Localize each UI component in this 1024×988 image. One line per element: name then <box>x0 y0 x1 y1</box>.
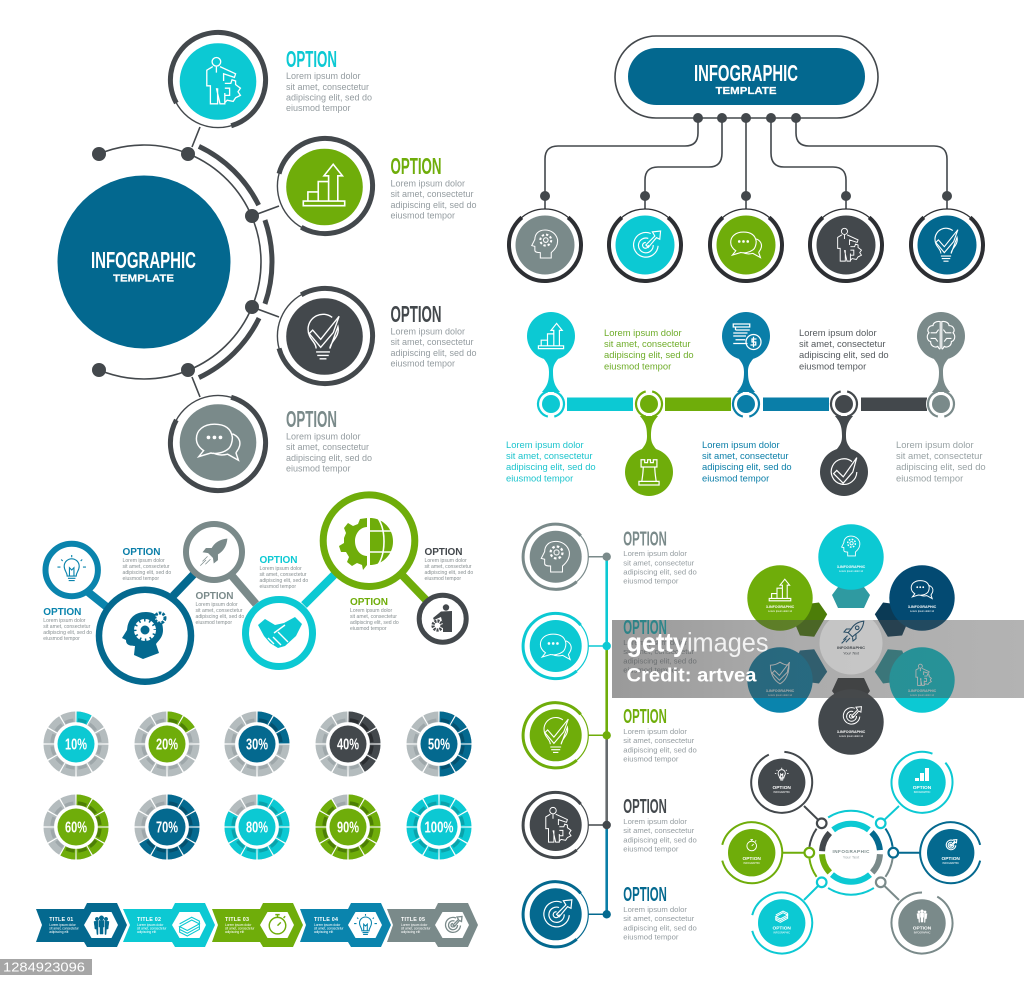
circle: bulb <box>896 194 998 296</box>
circle: chat <box>695 194 797 296</box>
step 03 <box>212 903 303 947</box>
satellite: dark bulb <box>749 749 815 815</box>
step 04 <box>300 903 391 947</box>
list text 2: Lorem ipsum dolor <box>623 638 687 647</box>
panel: percentage donut gauges <box>49 717 466 854</box>
petal: upper right: Lorem ipsum dolor sit <box>910 610 934 613</box>
step 03: Lorem ipsum dolor <box>225 923 252 927</box>
satellite: blue target: INFOGRAPHIC <box>942 862 959 865</box>
option 3 text <box>390 301 477 368</box>
list item: target <box>510 868 611 960</box>
timeline text blocks: eiusmod tempor <box>799 360 866 372</box>
step 05: TITLE 05 <box>401 917 425 923</box>
list text 5: Lorem ipsum dolor <box>623 905 687 914</box>
list text 4: OPTION <box>623 795 667 818</box>
timeline text blocks: Lorem ipsum dolor <box>506 439 584 450</box>
title pill: TEMPLATE <box>716 86 777 97</box>
satellite: cyan money: INFOGRAPHIC <box>773 932 790 934</box>
satellite: cyan chart <box>879 739 965 825</box>
watermark band: Your Text <box>843 651 860 655</box>
gauge 40% <box>321 717 375 771</box>
text: option gray: Lorem ipsum dolor <box>196 602 238 608</box>
central circle with title <box>58 176 230 348</box>
gauge 70%: 70% <box>156 820 178 836</box>
text: option green: OPTION <box>350 597 388 608</box>
gauge 60%: 60% <box>65 820 87 836</box>
timeline text blocks: adipiscing elit, sed do <box>799 349 889 360</box>
panel: hexagon ribbon steps <box>36 903 478 947</box>
petal: upper left <box>747 565 813 631</box>
option 2 text: OPTION <box>390 153 442 179</box>
central circle with title: INFOGRAPHIC <box>91 247 196 273</box>
text: option light blue: adipiscing elit, sed do <box>43 630 92 636</box>
timeline text blocks: eiusmod tempor <box>896 472 963 484</box>
step 01: Lorem ipsum dolor <box>49 923 77 927</box>
text: option gray: eiusmod tempor <box>196 620 232 626</box>
text: option green: eiusmod tempor <box>350 626 387 632</box>
option 3 text: adipiscing elit, sed do <box>390 348 477 358</box>
option 2 text: eiusmod tempor <box>390 210 455 220</box>
list text 5 <box>623 883 697 942</box>
option 3 text: sit amet, consectetur <box>390 337 474 347</box>
list text 4: Lorem ipsum dolor <box>623 817 687 826</box>
text: option blue <box>122 547 171 582</box>
list text 3: Lorem ipsum dolor <box>623 727 687 736</box>
satellite: cyan chart: OPTION <box>913 785 932 791</box>
title pill <box>615 36 878 118</box>
gauge 10%: 10% <box>65 736 87 754</box>
text: option cyan: adipiscing elit, sed do <box>260 578 308 584</box>
timeline text blocks: Lorem ipsum dolor <box>604 327 682 338</box>
gauge 20%: 20% <box>156 736 178 754</box>
circle: person gear <box>419 595 466 642</box>
text: option cyan: OPTION <box>260 555 298 566</box>
text: option light blue: Lorem ipsum dolor <box>43 618 86 624</box>
list item: person gear <box>510 779 611 871</box>
connector lines <box>545 118 947 209</box>
text: option dark: eiusmod tempor <box>424 576 461 582</box>
petal: bottom <box>818 689 884 755</box>
text: option gray: sit amet, consectetur <box>196 608 243 614</box>
petal: top: Lorem ipsum dolor sit <box>839 570 863 573</box>
circle: handshake <box>246 600 312 666</box>
text: option cyan <box>260 555 308 590</box>
step 04: sit amet, consectetur <box>314 926 344 930</box>
text: option gray: adipiscing elit, sed do <box>196 614 244 620</box>
text: option dark: adipiscing elit, sed do <box>424 570 473 576</box>
timeline text blocks: sit amet, consectetur <box>896 450 982 461</box>
spokes <box>782 806 921 900</box>
watermark band: Credit: artvea <box>626 666 757 686</box>
petal: lower right: 3-INFOGRAPHIC <box>908 689 937 693</box>
gauge 100%: 100% <box>424 820 454 836</box>
satellite: green watch: OPTION <box>743 856 761 862</box>
gauge 30%: 30% <box>246 736 268 754</box>
option 2 circle <box>267 128 383 244</box>
step 02: adipiscing elit <box>137 930 156 934</box>
option 4 circle <box>159 384 277 502</box>
satellite: gray people: OPTION <box>913 926 932 932</box>
text: option light blue: OPTION <box>43 607 81 618</box>
text: option green <box>350 597 399 632</box>
step 02: Lorem ipsum dolor <box>137 923 164 927</box>
option 2 text: sit amet, consectetur <box>390 189 474 199</box>
list text 3: adipiscing elit, sed do <box>623 745 697 754</box>
list text 3 <box>623 705 697 764</box>
list text 5: adipiscing elit, sed do <box>623 923 697 932</box>
pin 2: rook <box>625 388 673 496</box>
timeline text blocks <box>506 327 986 484</box>
option 1 text: eiusmod tempor <box>286 103 351 113</box>
text: option blue: sit amet, consectetur <box>122 564 170 570</box>
option 3 text: eiusmod tempor <box>390 358 455 368</box>
option 1 text: adipiscing elit, sed do <box>286 92 372 102</box>
step 05: Lorem ipsum dolor <box>401 923 428 927</box>
gauge 90%: 90% <box>337 820 359 836</box>
option 4 text: adipiscing elit, sed do <box>286 453 372 463</box>
step 01: adipiscing elit <box>49 930 69 934</box>
list text 3: OPTION <box>623 705 667 728</box>
panel: gear flower diagram <box>747 524 955 755</box>
panel: hierarchy with title pill and five circles <box>494 36 998 296</box>
petal: upper left: 3-INFOGRAPHIC <box>766 605 795 609</box>
satellite: blue target <box>913 815 988 890</box>
text: option cyan: eiusmod tempor <box>260 584 296 590</box>
text: option gray: OPTION <box>196 591 234 602</box>
inner segmented ring <box>810 812 892 894</box>
satellite: cyan money: OPTION <box>773 926 791 932</box>
list text 3: eiusmod tempor <box>623 755 679 764</box>
circle: gear globe <box>323 495 415 586</box>
watermark band <box>612 612 1024 698</box>
title pill: INFOGRAPHIC <box>694 60 798 86</box>
pin 4: check <box>820 388 868 496</box>
satellite: gray people <box>880 881 964 965</box>
list text 4: adipiscing elit, sed do <box>623 835 697 844</box>
satellite: dark bulb: OPTION <box>773 785 791 791</box>
timeline text blocks: eiusmod tempor <box>702 472 769 484</box>
option 4 text: Lorem ipsum dolor <box>286 432 361 442</box>
option 4 text <box>286 406 372 474</box>
watermark band: INFOGRAPHIC <box>837 645 865 650</box>
text: option green: adipiscing elit, sed do <box>350 620 399 626</box>
timeline text blocks: adipiscing elit, sed do <box>896 461 986 472</box>
timeline text blocks: sit amet, consectetur <box>799 338 886 349</box>
step 01: sit amet, consectetur <box>49 926 80 930</box>
option 4 text: OPTION <box>286 406 337 432</box>
vertical line segments <box>605 557 608 914</box>
text: option cyan: sit amet, consectetur <box>260 572 307 578</box>
step 02: TITLE 02 <box>137 917 161 923</box>
timeline text blocks: eiusmod tempor <box>604 360 671 372</box>
petal: lower right <box>889 647 955 713</box>
list text 4 <box>623 795 697 854</box>
petal: lower left: 3-INFOGRAPHIC <box>766 689 795 693</box>
option 4 text: eiusmod tempor <box>286 464 351 474</box>
timeline text blocks: Lorem ipsum dolor <box>799 327 877 338</box>
list text 4: sit amet, consectetur <box>623 826 695 835</box>
gauge 10% <box>49 717 103 771</box>
central circle with title: TEMPLATE <box>113 274 174 284</box>
timeline text blocks: sit amet, consectetur <box>702 450 788 461</box>
list item: chat <box>510 600 611 692</box>
step 02: sit amet, consectetur <box>137 926 167 930</box>
gauge 20% <box>140 717 194 771</box>
list text 2: adipiscing elit, sed do <box>623 656 697 665</box>
satellite: blue target: OPTION <box>942 856 960 862</box>
circle: head gear <box>494 194 596 296</box>
image id tag: 1284923096 <box>3 960 85 974</box>
gauge 100% <box>412 800 466 854</box>
text: option blue: OPTION <box>122 547 160 558</box>
satellite: green watch: INFOGRAPHIC <box>743 862 760 865</box>
list text 5: sit amet, consectetur <box>623 914 695 923</box>
petal: upper right <box>889 565 955 631</box>
text: option blue: eiusmod tempor <box>122 576 159 582</box>
option 1 text: Lorem ipsum dolor <box>286 71 361 81</box>
petal: upper left: Lorem ipsum dolor sit <box>768 610 792 613</box>
gear teeth <box>793 587 909 699</box>
option 2 text: Lorem ipsum dolor <box>390 178 465 188</box>
timeline text blocks: Lorem ipsum dolor <box>896 439 974 450</box>
timeline text blocks: eiusmod tempor <box>506 472 573 484</box>
text: option dark <box>424 547 473 582</box>
gauge 70% <box>140 800 194 854</box>
timeline text blocks: adipiscing elit, sed do <box>702 461 792 472</box>
list text 2: OPTION <box>623 616 667 639</box>
text: option light blue <box>43 607 92 642</box>
list text 2 <box>623 616 697 675</box>
text: option green: Lorem ipsum dolor <box>350 608 392 614</box>
list text 4: eiusmod tempor <box>623 845 679 854</box>
step 03: TITLE 03 <box>225 917 249 923</box>
list text 1: OPTION <box>623 528 667 551</box>
text: option light blue: eiusmod tempor <box>43 636 80 642</box>
option 3 text: Lorem ipsum dolor <box>390 326 465 336</box>
satellite: cyan chart: INFOGRAPHIC <box>914 791 931 794</box>
list text 5: OPTION <box>623 883 667 906</box>
text: option dark: Lorem ipsum dolor <box>424 558 467 564</box>
option 1 text: sit amet, consectetur <box>286 82 369 92</box>
image id tag <box>0 959 92 975</box>
option 1 circle <box>153 15 283 145</box>
petal: bottom: Lorem ipsum dolor sit <box>839 735 863 738</box>
timeline text blocks: adipiscing elit, sed do <box>506 461 596 472</box>
option 3 circle <box>260 271 390 401</box>
list item: head gear <box>510 511 611 603</box>
circle: head <box>99 590 191 682</box>
step 04: TITLE 04 <box>314 917 338 923</box>
text: option blue: Lorem ipsum dolor <box>122 558 165 564</box>
gauge 80%: 80% <box>246 820 268 836</box>
nodes <box>804 818 898 887</box>
list text 1: Lorem ipsum dolor <box>623 549 687 558</box>
circle: rocket <box>186 524 242 580</box>
option 3 text: OPTION <box>390 301 442 327</box>
petal: upper right: 3-INFOGRAPHIC <box>908 605 937 609</box>
circle: target <box>594 194 696 296</box>
panel: network hub diagram <box>714 739 988 965</box>
hub label: INFOGRAPHIC <box>832 849 870 854</box>
petal: lower right: Lorem ipsum dolor sit <box>910 694 934 697</box>
hub label <box>832 849 870 860</box>
step 05 <box>387 903 478 947</box>
panel: linked magnifier circles <box>43 495 473 682</box>
pin 5: brain <box>917 312 965 420</box>
step 01: TITLE 01 <box>49 917 73 923</box>
step 04: adipiscing elit <box>314 930 333 934</box>
petal: lower left: Lorem ipsum dolor sit <box>768 694 792 697</box>
watermark band: gettyimages <box>626 628 768 658</box>
option 2 text <box>390 153 477 220</box>
hub label: Your Text <box>843 854 860 860</box>
list text 5: eiusmod tempor <box>623 933 679 942</box>
gauge 90% <box>321 800 375 854</box>
text: option green: sit amet, consectetur <box>350 614 397 620</box>
panel: horizontal timeline with drop pins <box>506 312 986 496</box>
petal: bottom: 3-INFOGRAPHIC <box>837 730 866 734</box>
option 4 text: sit amet, consectetur <box>286 442 369 452</box>
text: option blue: adipiscing elit, sed do <box>122 570 171 576</box>
list item: bulb <box>510 689 611 781</box>
step 03: adipiscing elit <box>225 930 244 934</box>
list text 1: eiusmod tempor <box>623 577 679 586</box>
timeline text blocks: Lorem ipsum dolor <box>702 439 780 450</box>
list text 1: sit amet, consectetur <box>623 558 695 567</box>
gauge 50%: 50% <box>428 736 450 754</box>
step 01 <box>36 903 127 947</box>
connector dots <box>540 113 952 201</box>
gauge 60% <box>49 800 103 854</box>
option 1 text <box>286 46 372 113</box>
step 04: Lorem ipsum dolor <box>314 923 341 927</box>
connectors <box>88 574 426 608</box>
timeline text blocks: sit amet, consectetur <box>604 338 690 349</box>
satellite: dark bulb: INFOGRAPHIC <box>773 791 790 794</box>
gauge 40%: 40% <box>337 736 359 754</box>
pin 1: chart <box>527 312 575 420</box>
text: option dark: sit amet, consectetur <box>424 564 472 570</box>
list text 2: sit amet, consectetur <box>623 647 695 656</box>
panel: vertical option list <box>510 511 697 960</box>
timeline bars <box>567 398 927 411</box>
outer arcs <box>793 794 909 911</box>
petal: top: 3-INFOGRAPHIC <box>837 565 866 569</box>
pin 3: coins <box>722 312 770 420</box>
text: option light blue: sit amet, consectetur <box>43 624 91 630</box>
text: option dark: OPTION <box>424 547 462 558</box>
satellite: cyan money <box>744 886 819 960</box>
step 05: adipiscing elit <box>401 930 420 934</box>
option 1 text: OPTION <box>286 46 337 72</box>
gauge 50% <box>412 717 466 771</box>
step 05: sit amet, consectetur <box>401 926 431 930</box>
connector arcs and dots <box>0 91 315 433</box>
gauge 30% <box>230 717 284 771</box>
list text 1: adipiscing elit, sed do <box>623 568 697 576</box>
text: option gray <box>196 591 244 626</box>
circle: bulb <box>45 544 98 596</box>
petal: lower left <box>747 647 813 713</box>
list text 2: eiusmod tempor <box>623 666 679 675</box>
gauge 80% <box>230 800 284 854</box>
option 2 text: adipiscing elit, sed do <box>390 200 477 210</box>
satellite: green watch <box>714 815 789 890</box>
satellite: gray people: INFOGRAPHIC <box>914 932 931 934</box>
panel: radial infographic with four options <box>0 15 477 502</box>
timeline text blocks: adipiscing elit, sed do <box>604 349 694 360</box>
petal: top <box>818 524 884 590</box>
circle: person gear <box>795 194 897 296</box>
step 03: sit amet, consectetur <box>225 926 255 930</box>
list text 3: sit amet, consectetur <box>623 736 695 745</box>
step 02 <box>123 903 215 947</box>
text: option cyan: Lorem ipsum dolor <box>260 566 302 572</box>
timeline text blocks: sit amet, consectetur <box>506 450 592 461</box>
list text 1 <box>623 528 697 586</box>
